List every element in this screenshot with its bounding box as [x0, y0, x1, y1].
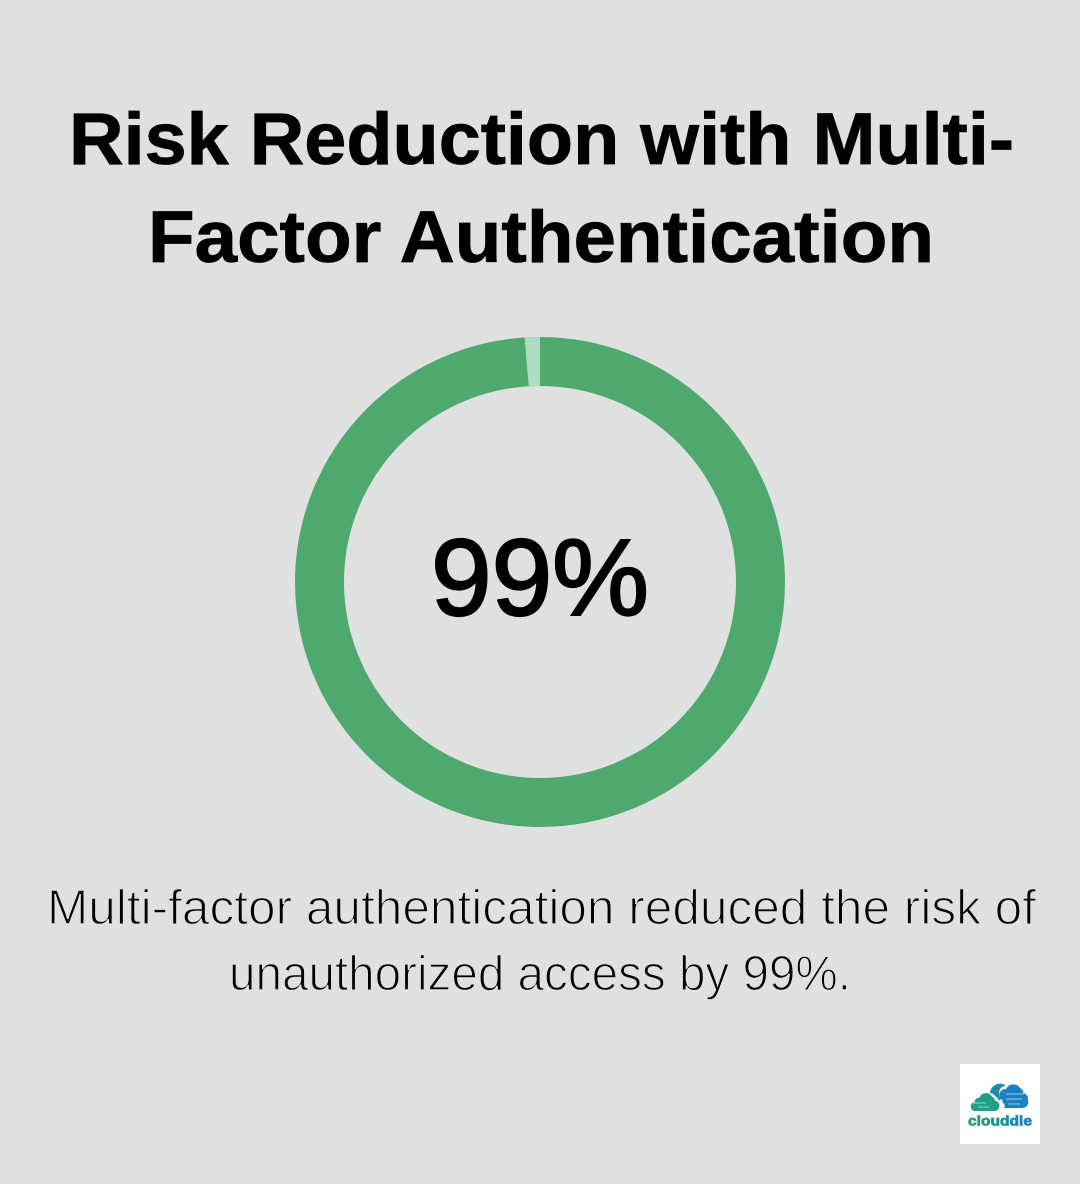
description text: unauthorized access by 99%.	[229, 947, 851, 1001]
title	[69, 99, 1014, 278]
icon: left cloud	[971, 1093, 1000, 1111]
logo circuit lines	[973, 1094, 1024, 1107]
description text	[47, 881, 1036, 1001]
logo wordmark: clouddle	[968, 1112, 1032, 1128]
donut chart: 99%	[320, 337, 760, 802]
donut center value: 99%	[431, 517, 649, 639]
description text: Multi-factor authentication reduced the risk of	[47, 881, 1036, 935]
donut segment: remaining 1%	[525, 337, 540, 386]
title: Factor Authentication	[148, 197, 934, 278]
logo: clouddle	[960, 1064, 1040, 1144]
icon: middle arc	[990, 1084, 1005, 1101]
title: Risk Reduction with Multi-	[69, 99, 1014, 180]
icon: right cloud	[999, 1084, 1028, 1108]
donut segment: 99% reduced	[320, 362, 760, 802]
